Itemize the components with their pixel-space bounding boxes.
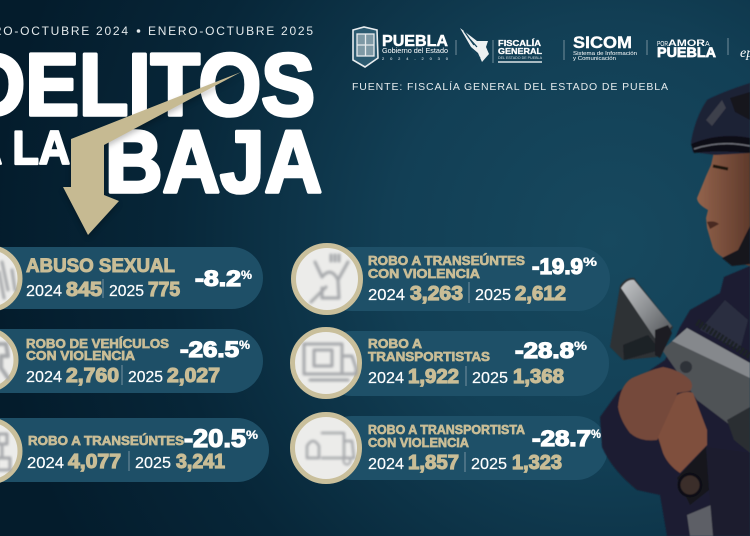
rifle stock (610, 278, 673, 360)
hand on trigger (658, 392, 707, 473)
logo: SICOM: y Comunicación (573, 56, 616, 62)
watch (677, 447, 709, 505)
logo: Fiscalía General (460, 28, 543, 63)
icon: robo a transeúntes (0, 420, 20, 482)
panel: robo a transeúntes: ROBO A TRANSEÚNTES (28, 433, 184, 448)
logo: Puebla: PUEBLA (382, 33, 448, 50)
logo: Por amor a Puebla: POR (657, 41, 668, 48)
logo: Puebla: Gobierno del Estado (382, 46, 448, 55)
icon: robo a transportista con violencia (292, 414, 360, 482)
panel: robo de vehículos con violencia: % (239, 338, 250, 352)
chin strap (722, 226, 750, 266)
panel: robo a transeúntes con violencia (294, 246, 610, 312)
panel: robo a transeúntes con violencia: % (583, 255, 597, 269)
panel: abuso sexual: -8.2 (195, 266, 241, 291)
panel: abuso sexual: 845 (66, 279, 102, 301)
panel: robo a transeúntes: 3,241 (176, 451, 225, 473)
panel: robo a transportista con violencia (292, 414, 608, 482)
panel: robo a transportistas: 1,922 (408, 366, 459, 388)
panel: abuso sexual: 2025 (109, 283, 144, 300)
right hand sleeve (705, 447, 750, 536)
rifle body (655, 322, 750, 453)
icon: robo a transeúntes con violencia (294, 246, 360, 312)
arrow (63, 72, 241, 238)
panel: abuso sexual: 2024 (26, 283, 62, 300)
panel: robo a transportista con violencia: CON VIOLENCIA (368, 435, 470, 450)
panel: robo a transportista con violencia: 1,323 (512, 452, 562, 474)
icon: abuso sexual (0, 248, 20, 310)
panel: robo a transportistas: 2025 (472, 370, 508, 387)
panel: robo a transportistas: -28.8 (515, 338, 574, 363)
panel: robo a transportistas: 1,368 (513, 366, 564, 388)
panel: robo de vehículos con violencia: 2025 (128, 369, 163, 386)
hand on grip (618, 367, 692, 440)
logo: Por amor a Puebla: A (705, 41, 710, 48)
date range heading: ENERO-OCTUBRE 2025 (148, 24, 313, 38)
panel: robo de vehículos con violencia: 2,027 (167, 365, 220, 387)
panel: robo a transportista con violencia: % (591, 427, 601, 441)
panel: abuso sexual: % (241, 268, 252, 282)
panel: robo de vehículos con violencia: CON VIOLENCIA (26, 348, 136, 363)
logos (353, 27, 750, 67)
torso (600, 266, 750, 536)
logo: Puebla (353, 27, 449, 67)
panel: robo a transeúntes: -20.5 (184, 425, 246, 453)
panel: robo a transeúntes con violencia: 3,263 (410, 283, 463, 305)
logo: Por amor a Puebla: AMOR (668, 38, 705, 49)
panel: robo a transeúntes: 2025 (135, 455, 171, 472)
logo: SICOM: SICOM (573, 33, 632, 52)
panel: robo a transportistas: TRANSPORTISTAS (368, 349, 490, 364)
panel: robo a transeúntes con violencia: 2024 (368, 287, 405, 304)
panel: robo a transeúntes: % (246, 428, 258, 442)
panel: robo a transportista con violencia: -28.7 (532, 426, 591, 451)
panel: robo a transeúntes: 4,077 (68, 451, 121, 473)
face (697, 150, 750, 266)
icon: robo a transportistas (292, 330, 360, 396)
lower vest strap (687, 500, 726, 536)
panel: robo a transeúntes (0, 418, 269, 482)
panel: abuso sexual (0, 247, 263, 310)
panel: robo a transportistas (292, 330, 609, 396)
panel: robo a transeúntes: 2024 (27, 455, 64, 472)
logo: Por amor a Puebla: PUEBLA (657, 44, 716, 60)
panel: abuso sexual: ABUSO SEXUAL (26, 255, 175, 277)
panel: robo de vehículos con violencia: -26.5 (180, 337, 239, 362)
logo: Fiscalía General: DEL ESTADO DE PUEBLA (498, 56, 543, 60)
helmet (691, 83, 750, 155)
panel: robo a transportista con violencia: ROBO A TRANSPORTISTA (368, 422, 526, 437)
title (0, 35, 322, 211)
panel: robo de vehículos con violencia: 2024 (26, 369, 62, 386)
panel: robo a transeúntes con violencia: ROBO A TRANSEÚNTES (368, 253, 525, 268)
panel: robo a transportistas: ROBO A (368, 336, 423, 351)
panel: robo a transeúntes con violencia: CON VIOLENCIA (368, 266, 481, 281)
logo: SICOM: Sistema de Información (573, 51, 637, 57)
panel: robo a transportista con violencia: 1,857 (408, 452, 459, 474)
logo: Puebla: 2024-2030 (382, 56, 449, 61)
panel: robo a transportistas: 2024 (368, 370, 404, 387)
logo: Fiscalía General: FISCALÍA (498, 39, 541, 48)
panel: abuso sexual: 775 (148, 279, 180, 301)
panel: robo a transportista con violencia: 2025 (471, 456, 507, 473)
logo: SICOM (573, 33, 637, 62)
panel: robo de vehículos con violencia: ROBO DE VEHÍCULOS (26, 336, 169, 351)
panel: robo de vehículos con violencia: 2,760 (66, 365, 119, 387)
logo: Fiscalía General: GENERAL (498, 47, 542, 56)
date range heading (0, 24, 313, 38)
panel: robo a transportista con violencia: 2024 (368, 456, 404, 473)
title: BAJA (105, 112, 322, 211)
icon: robo de vehículos (0, 330, 16, 390)
panel: robo de vehículos con violencia (0, 329, 263, 393)
panel: robo a transportistas: % (574, 339, 587, 353)
panel: robo a transeúntes con violencia: 2,612 (515, 283, 566, 305)
panel: robo a transeúntes con violencia: 2025 (475, 287, 511, 304)
police officer illustration (600, 83, 750, 536)
source line: FUENTE: FISCALÍA GENERAL DEL ESTADO DE PUEBLA (352, 80, 668, 93)
panel: robo a transeúntes con violencia: -19.9 (532, 254, 583, 279)
